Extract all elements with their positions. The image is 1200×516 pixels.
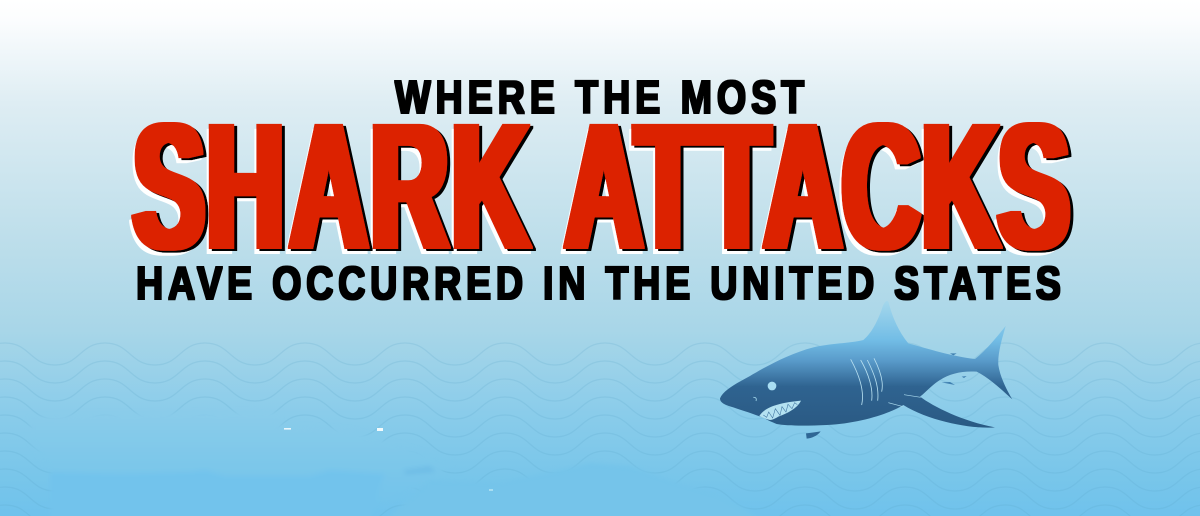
- shark nostril: [753, 397, 756, 401]
- shark teeth: [759, 401, 801, 420]
- water patches covering the waves: [30, 412, 770, 516]
- shark gills: [851, 358, 882, 405]
- wave pattern: [0, 343, 1200, 516]
- shark eye: [768, 382, 776, 390]
- title: shark attacks: SHARK ATTACKS: [133, 87, 1070, 287]
- shark body: [720, 301, 1012, 428]
- title line 1: where the most: WHERE THE MOST: [395, 71, 804, 123]
- white specks in water: [284, 428, 493, 491]
- shark small fins: [806, 353, 967, 439]
- title line 3: have occurred in the united states: HAVE OCCURRED IN THE UNITED STATES: [136, 257, 1061, 309]
- shark pectoral fin highlight: [888, 395, 921, 407]
- icon: shark: [720, 301, 1012, 439]
